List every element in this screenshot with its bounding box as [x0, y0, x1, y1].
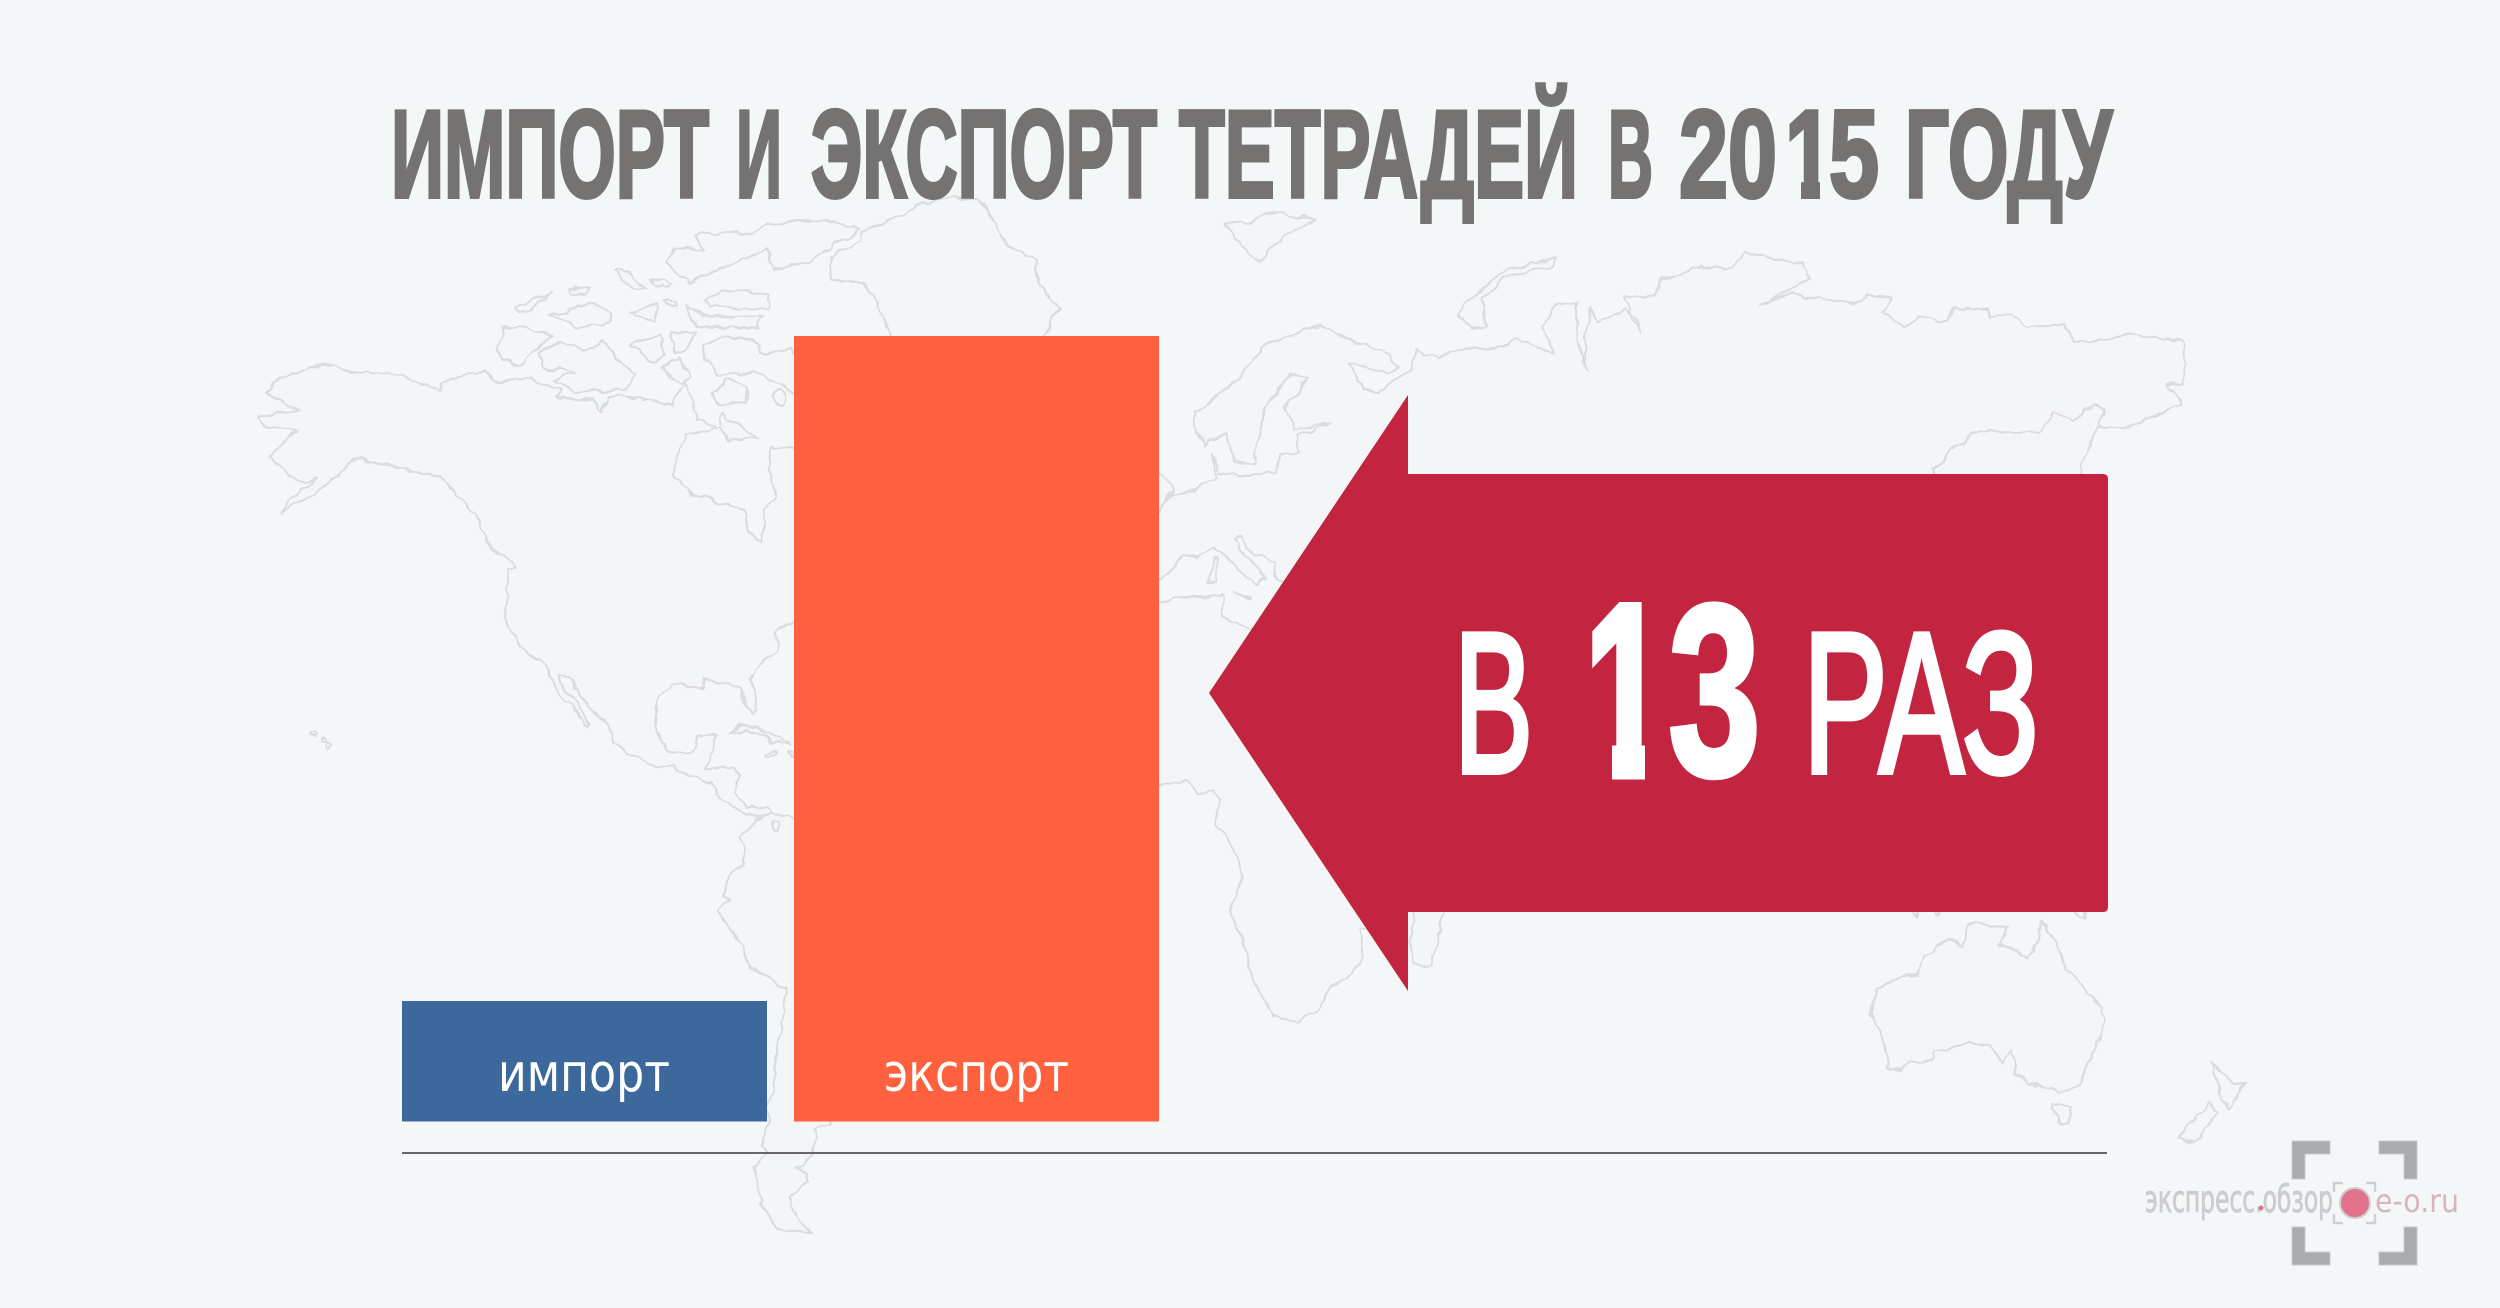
- callout arrow: 13 times: 1: [1585, 553, 1666, 827]
- world map background: [257, 197, 2244, 1232]
- callout arrow: 13 times: [1209, 395, 2108, 991]
- title: ИМПОРТ: [391, 86, 709, 224]
- map: Canadian Arctic islands: [497, 220, 860, 442]
- title: ТЕТРАДЕЙ: [1179, 84, 1578, 224]
- map: North America: [257, 363, 800, 817]
- callout arrow: 13 times: 3: [1668, 553, 1761, 827]
- bar: import: [402, 1001, 767, 1122]
- map: Sardinia and Corsica: [1210, 558, 1218, 583]
- map: Novaya Zemlya: [1458, 258, 1556, 328]
- title: 20: [1679, 86, 1777, 224]
- title: ГОДУ: [1905, 86, 2113, 224]
- logo: wordmark: экспресс.обзор: [2145, 1178, 2333, 1221]
- map: Greenland: [831, 197, 1058, 345]
- map: South America: [720, 812, 835, 1232]
- chart baseline: [402, 1152, 2107, 1154]
- logo: small brackets: [2334, 1183, 2375, 1223]
- map: Hawaii: [310, 733, 333, 751]
- map: Britain: [1150, 468, 1174, 515]
- map: Svalbard: [1226, 212, 1318, 262]
- bar: import: импорт: [498, 1043, 670, 1104]
- title: ЭКСПОРТ: [811, 86, 1157, 224]
- map: Indonesia fragments: [1908, 905, 2086, 920]
- map: Caribbean islands: [730, 726, 794, 756]
- logo: express review watermark: [2145, 1141, 2459, 1265]
- map: Sakhalin and Kamchatka coast: [1932, 405, 2103, 500]
- map: Eurasia: [1150, 252, 2184, 600]
- callout arrow: 13 times: В: [1454, 592, 1533, 815]
- title: В: [1608, 86, 1653, 224]
- map: Lake Maracaibo: [773, 821, 779, 833]
- callout arrow: 13 times: РАЗ: [1803, 592, 2039, 815]
- map: Sicily: [1235, 592, 1252, 598]
- title: 5: [1829, 86, 1879, 224]
- title: [391, 84, 2113, 224]
- map: Tasmania: [2053, 1103, 2072, 1125]
- bar: export: [794, 336, 1159, 1122]
- map: New Zealand: [2177, 1062, 2244, 1143]
- map: Africa: [1150, 595, 1400, 1022]
- map: Madagascar: [1410, 900, 1447, 967]
- logo: pink circle: [2340, 1188, 2370, 1218]
- map: Australia: [1871, 922, 2104, 1095]
- logo: pink dot: [2258, 1206, 2264, 1210]
- bar: export: экспорт: [884, 1043, 1069, 1104]
- logo: domain: e-o.ru: [2375, 1182, 2459, 1220]
- logo: viewfinder corners: [2292, 1141, 2417, 1265]
- title: И: [736, 86, 782, 224]
- title: 1: [1785, 86, 1833, 224]
